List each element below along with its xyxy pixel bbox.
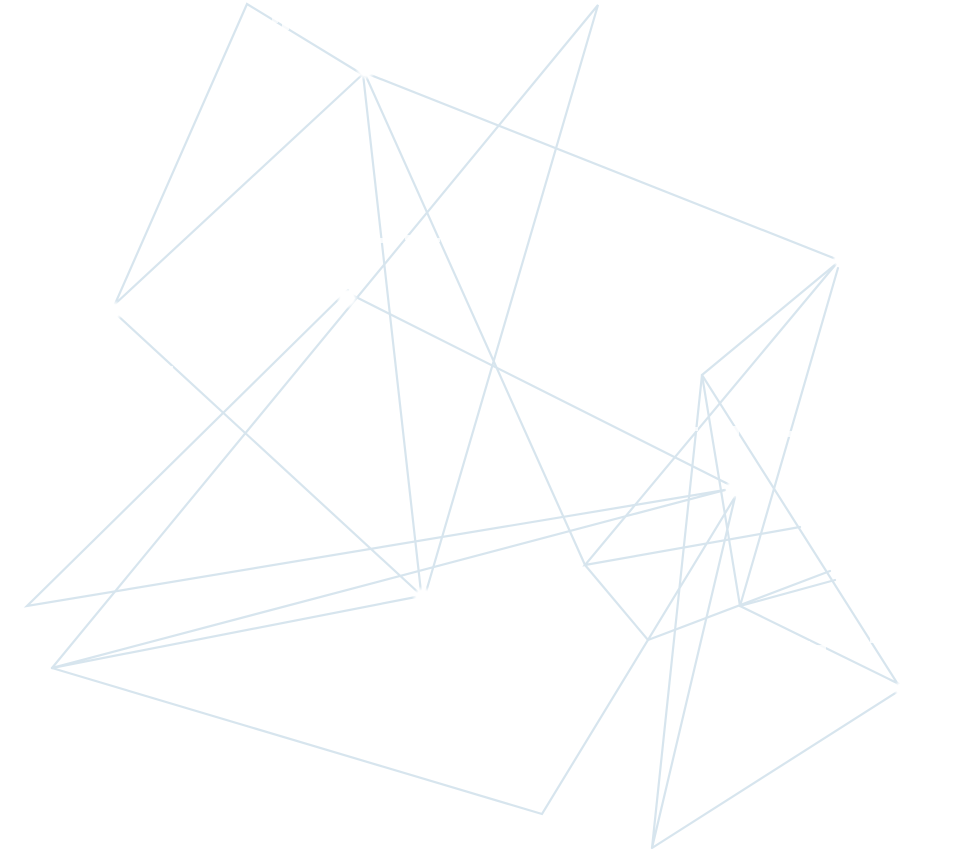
node: left hub [102,300,124,322]
node: top hub [355,58,377,80]
node: far right hub [893,680,911,698]
node: centre hub [336,287,358,309]
node: middle right hub [724,479,744,499]
faint label knockouts [166,17,875,651]
node: lower centre hub [412,586,434,608]
node: upper right hub [832,252,848,268]
